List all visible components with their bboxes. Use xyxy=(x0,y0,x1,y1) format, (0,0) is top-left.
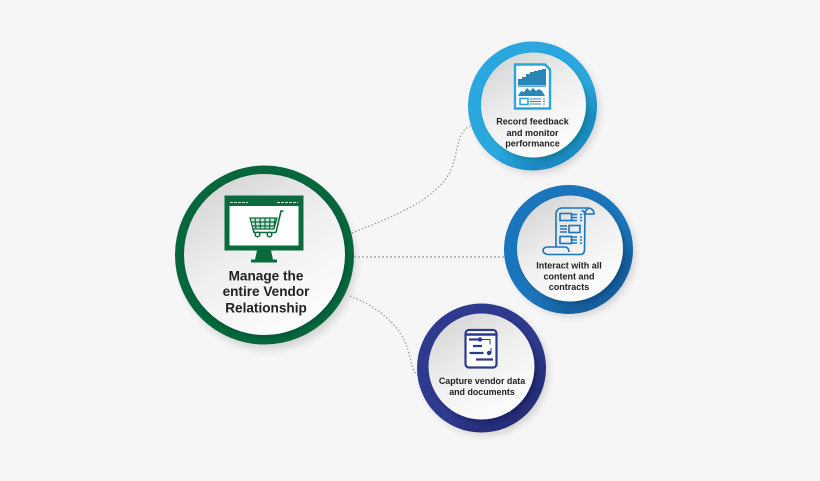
heading: main: Manage the xyxy=(229,268,304,284)
text: capture: and documents xyxy=(449,387,515,397)
heading: main: Relationship xyxy=(225,300,307,316)
panel: capture xyxy=(417,304,548,435)
panel: main circle xyxy=(175,166,356,350)
connector: bottom xyxy=(350,296,419,376)
text: record feedback: performance xyxy=(505,138,560,148)
heading: main: entire Vendor xyxy=(223,284,310,299)
panel: interact xyxy=(504,185,635,316)
icon: scroll xyxy=(543,208,594,254)
icon: monitor with cart xyxy=(224,196,304,262)
connector: middle xyxy=(354,256,505,258)
panel: record feedback xyxy=(468,42,599,173)
text: record feedback: Record feedback xyxy=(496,116,570,126)
connector: top xyxy=(352,125,472,233)
text: record feedback: and monitor xyxy=(506,128,559,138)
text: interact: Interact with all xyxy=(536,260,602,270)
icon: form xyxy=(466,330,496,368)
text: interact: contracts xyxy=(549,282,589,292)
text: capture: Capture vendor data xyxy=(439,376,525,386)
icon: report xyxy=(515,64,550,108)
text: interact: content and xyxy=(544,272,594,282)
